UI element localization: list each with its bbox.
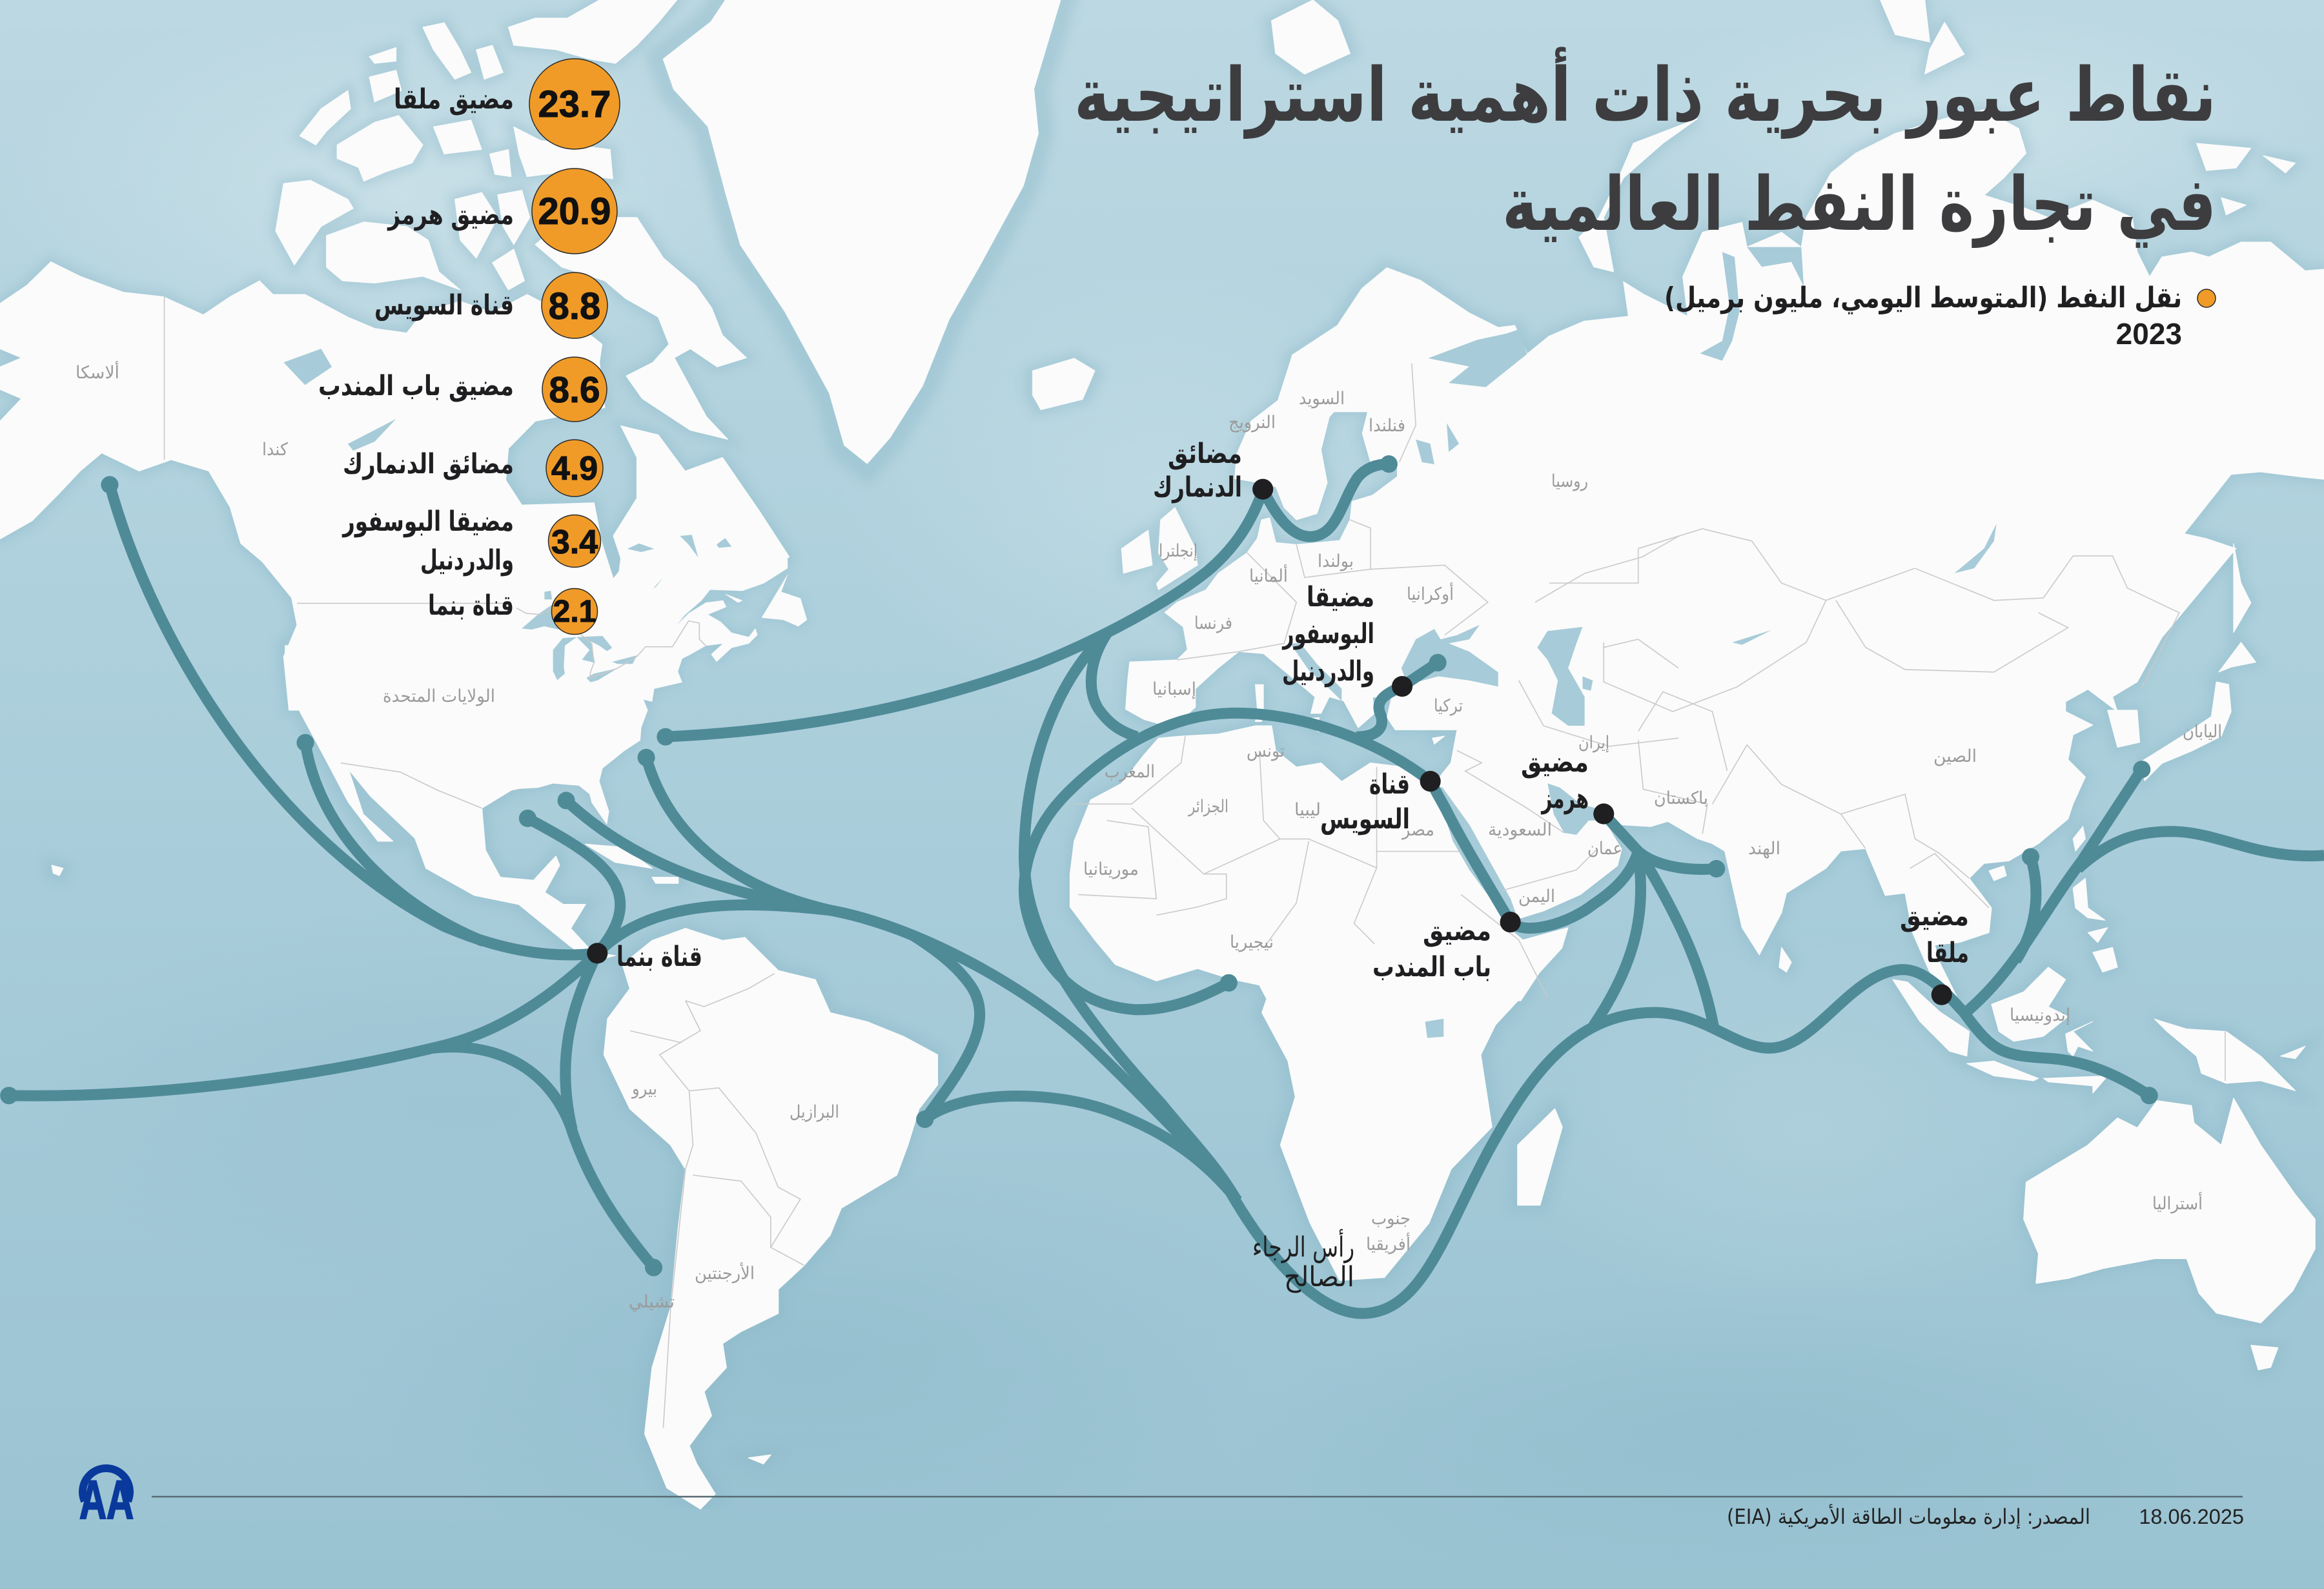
country name labels: إسبانيا bbox=[1152, 679, 1196, 699]
bubble row: Suez 8.8: 8.8 bbox=[549, 285, 600, 327]
route: Bab el-Mandeb to Arabian Sea bbox=[1511, 852, 1638, 928]
label: Cape of Good Hope: رأس الرجاء bbox=[1252, 1229, 1354, 1264]
country name labels: الجزائر bbox=[1187, 797, 1228, 817]
label: Suez Canal bbox=[1320, 768, 1410, 836]
country name labels: اليابان bbox=[2183, 722, 2222, 742]
country name labels: الولايات المتحدة bbox=[383, 686, 495, 706]
bubble row: Suez 8.8 bbox=[374, 272, 607, 338]
country name labels: الهند bbox=[1748, 839, 1780, 859]
country name labels: فنلندا bbox=[1369, 416, 1405, 436]
bubble row: Malacca 23.7: 23.7 bbox=[538, 83, 611, 125]
country name labels: روسيا bbox=[1551, 471, 1588, 491]
bubble row: Bosphorus and Dardanelles 3.4: والدردنيل bbox=[420, 544, 514, 577]
country borders bbox=[165, 296, 2225, 1428]
source: المصدر: إدارة معلومات الطاقة الأمريكية (EIA) bbox=[1727, 1504, 2090, 1529]
country name labels: أستراليا bbox=[2152, 1191, 2203, 1214]
country name labels: إيران bbox=[1578, 733, 1609, 753]
country name labels: عمان bbox=[1587, 839, 1622, 859]
label: Strait of Hormuz: هرمز bbox=[1541, 783, 1589, 815]
bubble row: Bosphorus and Dardanelles 3.4: مضيقا البوسفور bbox=[341, 506, 514, 538]
country name labels: ألاسكا bbox=[76, 360, 119, 383]
shipping routes bbox=[0, 455, 2324, 1313]
bubble row: Danish Straits 4.9: 4.9 bbox=[551, 450, 598, 487]
route end markers bbox=[0, 455, 2158, 1276]
label: Suez Canal: قناة bbox=[1369, 768, 1410, 801]
country name labels: بيرو bbox=[631, 1079, 657, 1099]
country name labels: مصر bbox=[1401, 820, 1434, 840]
country name labels: أفريقيا bbox=[1366, 1232, 1411, 1255]
country name labels: جنوب bbox=[1371, 1209, 1411, 1229]
route: Gulf of Mexico east to Atlantic bbox=[566, 801, 830, 910]
country name labels: الأرجنتين bbox=[695, 1262, 755, 1284]
bubble row: Panama 2.1 bbox=[428, 589, 598, 634]
route: Red Sea bbox=[1431, 781, 1511, 922]
country name labels: بولندا bbox=[1318, 551, 1354, 571]
route: Arabian Sea branch east bbox=[1642, 857, 1713, 1026]
bubble row: Panama 2.1: قناة بنما bbox=[428, 589, 514, 622]
bubble row: Bab el-Mandeb 8.6 bbox=[318, 357, 607, 422]
route: Malacca to Japan bbox=[1964, 770, 2142, 1014]
label: Strait of Malacca bbox=[1900, 900, 1969, 969]
label: Strait of Malacca: ملقا bbox=[1926, 937, 1969, 969]
icon: AA logo: AA bbox=[79, 1470, 134, 1530]
label: Bosphorus and Dardanelles: والدردنيل bbox=[1282, 655, 1374, 688]
country name labels: اليمن bbox=[1518, 887, 1555, 907]
country name labels: السويد bbox=[1299, 389, 1345, 409]
bubble row: Suez 8.8: قناة السويس bbox=[374, 289, 514, 322]
country name labels bbox=[76, 360, 2222, 1312]
route: Europe along West Africa to the Cape bbox=[1024, 633, 1236, 1199]
route: Alaska to Panama bbox=[110, 485, 597, 955]
chokepoint markers bbox=[587, 479, 1952, 1005]
route: Brazil to Cape bbox=[925, 1096, 1238, 1201]
bubble row: Bosphorus and Dardanelles 3.4: 3.4 bbox=[551, 524, 598, 561]
route: California to Panama bbox=[305, 743, 483, 941]
inland seas and lakes bbox=[283, 247, 1997, 1038]
label: Strait of Hormuz: مضيق bbox=[1521, 746, 1589, 779]
country name labels: نيجيريا bbox=[1230, 932, 1274, 952]
route: Pacific branch to Chile bbox=[433, 1047, 654, 1267]
label: Suez Canal: السويس bbox=[1320, 803, 1410, 836]
label: Strait of Hormuz bbox=[1521, 746, 1589, 815]
route: Suez through the Mediterranean to Nigeria bbox=[1024, 713, 1431, 1010]
route: Europe to Gibraltar loop bbox=[1091, 633, 1137, 737]
bubble row: Bosphorus and Dardanelles 3.4 bbox=[341, 506, 600, 577]
country name labels: السعودية bbox=[1488, 820, 1552, 840]
label: Bosphorus and Dardanelles: البوسفور bbox=[1282, 618, 1374, 650]
bubble row: Malacca 23.7 bbox=[394, 59, 620, 149]
icon: AA logo bbox=[79, 1468, 134, 1530]
date: 18.06.2025 bbox=[2139, 1505, 2244, 1528]
route: South China Sea bbox=[2016, 857, 2036, 961]
chokepoint labels on map bbox=[617, 438, 1969, 1293]
country name labels: المغرب bbox=[1105, 762, 1155, 782]
label: Strait of Malacca: مضيق bbox=[1900, 900, 1969, 932]
country name labels: النرويج bbox=[1228, 413, 1276, 433]
label: Cape of Good Hope bbox=[1252, 1229, 1354, 1293]
country name labels: البرازيل bbox=[790, 1102, 839, 1122]
bubble row: Bab el-Mandeb 8.6: مضيق باب المندب bbox=[318, 370, 514, 402]
label: Bab el-Mandeb: باب المندب bbox=[1372, 951, 1491, 983]
label: Bab el-Mandeb bbox=[1372, 915, 1491, 983]
route: Pacific to Panama bbox=[7, 953, 597, 1096]
country name labels: باكستان bbox=[1654, 788, 1708, 808]
country name labels: تشيلي bbox=[629, 1292, 675, 1312]
bubble row: Malacca 23.7: مضيق ملقا bbox=[394, 83, 514, 116]
country name labels: تونس bbox=[1247, 741, 1285, 761]
bubble row: Hormuz 20.9: 20.9 bbox=[538, 190, 611, 232]
route: Hormuz to India bbox=[1604, 814, 1717, 869]
route: Gulf of Mexico west to Panama bbox=[527, 818, 620, 953]
title bbox=[1074, 46, 2216, 248]
label: Cape of Good Hope: الصالح bbox=[1284, 1261, 1354, 1293]
route: Bosphorus bbox=[1356, 662, 1438, 737]
country name labels: أوكرانيا bbox=[1407, 582, 1454, 604]
route: Baltic bbox=[1263, 464, 1389, 537]
label: Bab el-Mandeb: مضيق bbox=[1423, 915, 1491, 947]
label: Bosphorus and Dardanelles bbox=[1282, 581, 1374, 688]
bubble row: Hormuz 20.9: مضيق هرمز bbox=[387, 199, 514, 231]
bubble row: Danish Straits 4.9: مضائق الدنمارك bbox=[343, 448, 514, 480]
label: Danish Straits: مضائق bbox=[1168, 438, 1242, 470]
route: US east coast to Atlantic bbox=[646, 757, 830, 910]
label: Danish Straits: الدنمارك bbox=[1153, 471, 1242, 504]
country name labels: تركيا bbox=[1434, 696, 1463, 716]
label: Panama Canal: قناة بنما bbox=[617, 941, 702, 973]
bubble row: Panama 2.1: 2.1 bbox=[553, 595, 596, 629]
country name labels: فرنسا bbox=[1194, 613, 1232, 633]
country name labels: الصين bbox=[1933, 746, 1977, 766]
route: Panama to Chile bbox=[566, 953, 597, 1130]
route: Brazil north to Atlantic bbox=[913, 936, 980, 1119]
route: Pacific east bbox=[2078, 832, 2324, 868]
legend bbox=[1664, 282, 2216, 351]
bubble row: Hormuz 20.9 bbox=[387, 169, 617, 254]
panel: bubble ranking bbox=[318, 59, 620, 634]
bubble row: Danish Straits 4.9 bbox=[343, 440, 603, 497]
country name labels: إندونيسيا bbox=[2010, 1005, 2070, 1025]
label: Bosphorus and Dardanelles: مضيقا bbox=[1307, 581, 1374, 613]
route: Panama through Atlantic, Cape and Indian Ocean bbox=[597, 905, 2149, 1313]
country name labels: إنجلترا bbox=[1159, 541, 1198, 561]
bubble row: Bab el-Mandeb 8.6: 8.6 bbox=[549, 369, 600, 411]
country name labels: موريتانيا bbox=[1083, 859, 1139, 879]
country name labels: ألمانيا bbox=[1249, 564, 1288, 586]
footer rule bbox=[152, 1496, 2243, 1497]
country name labels: ليبيا bbox=[1294, 800, 1321, 820]
legend: 2023 bbox=[2116, 317, 2182, 351]
label: Danish Straits bbox=[1153, 438, 1242, 504]
legend: نقل النفط (المتوسط اليومي، مليون برميل) bbox=[1664, 282, 2182, 314]
route: US east coast to Denmark bbox=[666, 491, 1263, 737]
country name labels: كندا bbox=[262, 440, 288, 460]
route: Arabian Sea branch west bbox=[1593, 852, 1641, 1026]
